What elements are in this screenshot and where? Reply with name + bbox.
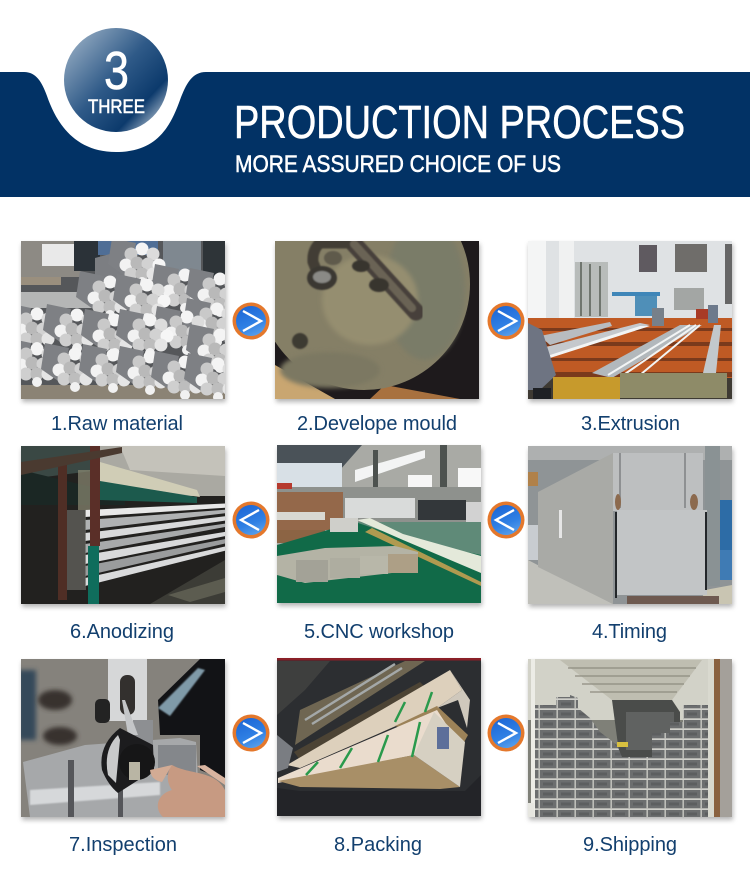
photo 4: timing (528, 446, 733, 607)
label: step 7: 7.Inspection (69, 834, 177, 856)
photo 2: mould (258, 178, 480, 402)
arrow: step 5 to 6 (232, 502, 270, 538)
arrow: step 4 to 5 (488, 502, 524, 538)
photo 5: CNC workshop (277, 445, 482, 606)
badge: step 3 (64, 28, 168, 132)
label: step 2: 2.Develope mould (297, 413, 457, 435)
badge: step 3: THREE (88, 96, 145, 118)
photo 1: raw material (3, 238, 244, 402)
photo 3: extrusion (528, 241, 733, 402)
label: step 9: 9.Shipping (583, 834, 677, 856)
photo 6: anodizing (21, 446, 236, 607)
label: step 4: 4.Timing (592, 621, 667, 643)
label: step 5: 5.CNC workshop (304, 621, 454, 643)
photo 8: packing (277, 658, 482, 819)
photo 9: shipping (528, 659, 733, 820)
badge: step 3: 3 (104, 41, 129, 101)
photo 7: inspection (18, 659, 226, 820)
label: step 6: 6.Anodizing (70, 621, 174, 643)
arrow: step 8 to 9 (488, 714, 524, 752)
arrow: step 2 to 3 (488, 302, 524, 340)
header band (0, 28, 750, 197)
subtitle: MORE ASSURED CHOICE OF US (235, 151, 561, 178)
label: step 8: 8.Packing (334, 834, 422, 856)
label: step 1: 1.Raw material (51, 413, 183, 435)
arrow: step 1 to 2 (232, 302, 270, 340)
label: step 3: 3.Extrusion (581, 413, 680, 435)
arrow: step 7 to 8 (232, 714, 270, 752)
